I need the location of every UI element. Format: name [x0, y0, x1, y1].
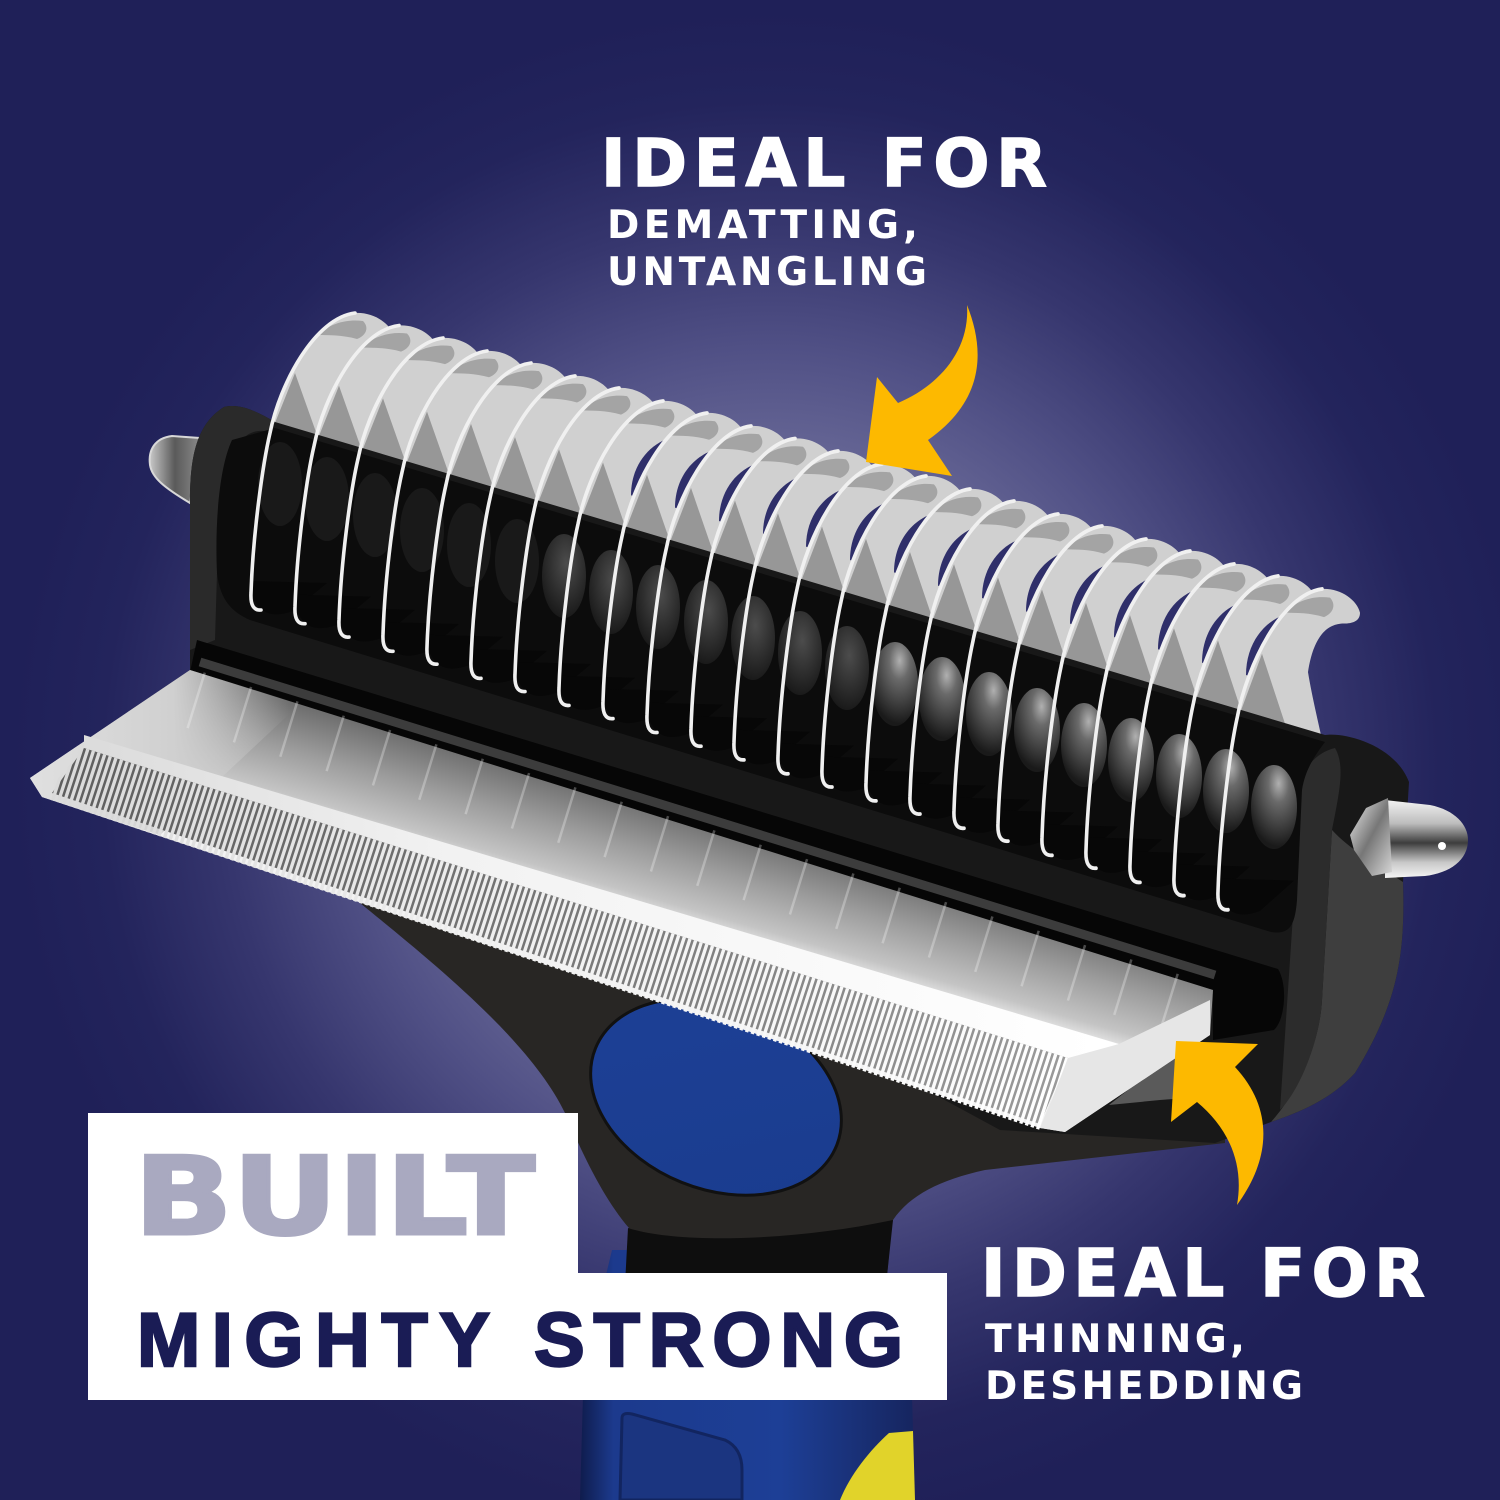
arrow: points to rake side	[866, 305, 978, 476]
title: built: BUILT	[134, 1135, 535, 1260]
blue grip handle	[580, 1250, 915, 1500]
head right side face	[1271, 830, 1403, 1122]
head right arm	[1280, 748, 1341, 1110]
label: ideal for thinning	[981, 1235, 1425, 1409]
title panel	[88, 1113, 947, 1400]
black head body	[190, 406, 1409, 1143]
subheading: deshedding: DESHEDDING	[985, 1364, 1303, 1409]
blade under-bevel	[1109, 1045, 1240, 1105]
subheading: dematting: DEMATTING,	[607, 203, 918, 248]
scraper blade	[20, 670, 1213, 1150]
title: mighty strong	[137, 1298, 903, 1383]
neck collar	[625, 1220, 893, 1285]
rake teeth plates	[249, 313, 1360, 916]
brushed metal segments	[195, 700, 1190, 1008]
label: ideal for dematting	[601, 125, 1047, 295]
subheading: untangling: UNTANGLING	[607, 250, 927, 295]
serrated comb teeth	[60, 772, 1060, 1097]
head left bracket rim	[190, 406, 275, 650]
right pin	[1350, 798, 1468, 878]
light end of blade	[1040, 1000, 1210, 1132]
tool neck and head underside	[360, 903, 1225, 1285]
left pin	[150, 436, 200, 503]
product: dematting and deshedding tool	[20, 313, 1468, 1500]
light left wedge	[30, 670, 300, 835]
word: mighty: MIGHTY	[137, 1298, 490, 1383]
serrated comb base	[52, 748, 1068, 1124]
roller window	[216, 428, 1325, 933]
heading: ideal for: IDEAL FOR	[601, 125, 1047, 202]
word: strong: STRONG	[534, 1298, 903, 1383]
channel lip	[200, 662, 1215, 975]
arrow: points to thinning blade	[1171, 1041, 1263, 1205]
white blade highlight band	[84, 735, 1119, 1062]
rollers	[258, 442, 1297, 849]
rake teeth bright edges	[249, 313, 1322, 914]
blade channel	[190, 640, 1284, 1040]
white title boxes	[88, 1113, 947, 1400]
blue thumb oval	[561, 963, 871, 1231]
subheading: thinning: THINNING,	[985, 1317, 1245, 1362]
heading: ideal for: IDEAL FOR	[981, 1235, 1425, 1312]
